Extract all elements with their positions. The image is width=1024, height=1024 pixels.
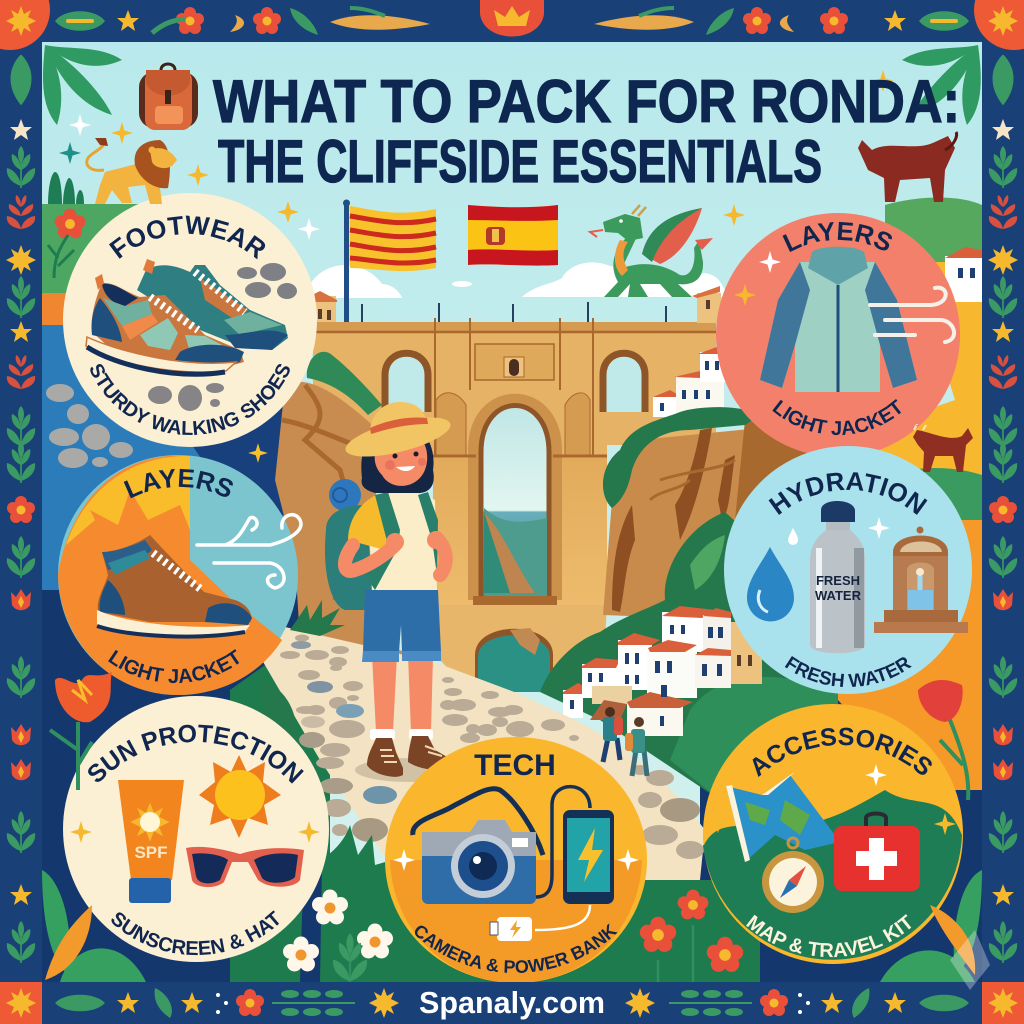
traveller <box>325 402 456 777</box>
caption: LIGHT JACKET <box>108 649 240 684</box>
water drop <box>747 547 794 621</box>
water bottle: FRESH <box>816 573 860 588</box>
panel: layers boot <box>58 443 303 695</box>
heading: ACCESSORIES <box>752 728 932 777</box>
panel: tech <box>385 737 647 982</box>
flag pole <box>343 200 350 324</box>
camera strap <box>413 789 543 855</box>
website credit: Spanaly.com <box>419 985 605 1020</box>
lion <box>87 138 177 204</box>
left cliff <box>275 352 440 665</box>
panel: footwear <box>63 193 317 447</box>
sun <box>199 755 281 838</box>
watermark sparkle <box>950 930 990 990</box>
hiking boot <box>97 535 252 637</box>
foreground plants <box>42 672 982 984</box>
right cliff <box>603 407 838 620</box>
phone cable <box>536 787 590 897</box>
title <box>213 68 960 195</box>
fountain <box>874 526 968 633</box>
map <box>726 772 840 862</box>
hiking boots <box>367 736 456 777</box>
water bottle: WATER <box>815 588 862 603</box>
panel: accessories <box>703 704 963 964</box>
jacket <box>760 247 917 392</box>
landscape <box>42 198 982 982</box>
Spanish flag <box>468 205 558 266</box>
camera <box>422 820 536 904</box>
first aid kit <box>834 814 920 891</box>
stones left <box>46 384 133 468</box>
caption: STURDY WALKING SHOES <box>90 364 290 435</box>
panel: sun protection <box>63 696 329 962</box>
heading: LAYERS <box>782 222 892 252</box>
caption: CAMERA & POWER BANK <box>414 924 618 973</box>
sunglasses <box>186 847 304 887</box>
panel: layers jacket <box>716 213 960 453</box>
arms <box>345 540 446 575</box>
Catalan flag <box>350 206 436 271</box>
water bottle <box>810 501 865 653</box>
rocks bottom <box>148 383 224 411</box>
plants near path <box>262 600 345 745</box>
corner leaves <box>43 45 981 125</box>
buildings top-left <box>310 291 337 322</box>
caption: FRESH WATER <box>784 656 912 687</box>
rocks top <box>237 263 297 299</box>
heading: FOOTWEAR <box>109 216 266 260</box>
trees on hill <box>48 172 84 204</box>
power bank <box>490 905 590 941</box>
caption: LIGHT JACKET <box>772 399 901 436</box>
front shoe <box>86 274 244 374</box>
wind lines <box>197 515 301 588</box>
heading: TECH <box>474 749 556 782</box>
white village top-right <box>653 247 982 417</box>
clouds <box>305 262 730 298</box>
small bull <box>913 425 973 472</box>
backpack <box>325 479 375 610</box>
legs <box>370 655 433 740</box>
compass <box>762 838 824 913</box>
heading: LAYERS <box>124 468 233 498</box>
wind lines <box>870 288 954 342</box>
sunscreen tube: SPF <box>134 843 168 862</box>
left hill flower <box>48 209 85 278</box>
smartphone <box>563 810 614 904</box>
sky accents <box>59 70 894 240</box>
back shoe <box>137 259 288 350</box>
heading: HYDRATION <box>768 472 928 515</box>
bull <box>858 132 957 202</box>
forest <box>540 512 838 800</box>
Puente Nuevo bridge <box>313 302 716 692</box>
hikers <box>603 707 647 776</box>
caption: MAP & TRAVEL KIT <box>746 914 912 958</box>
sunscreen tube <box>118 780 184 903</box>
cobblestone path <box>262 627 705 880</box>
hair and head <box>361 425 434 493</box>
straw hat <box>342 402 454 465</box>
green meadow below path <box>320 825 400 982</box>
shirt and shorts <box>348 492 441 662</box>
panel: hydration <box>724 446 972 694</box>
heading: SUN PROTECTION <box>88 724 304 784</box>
backpack icon <box>139 64 198 130</box>
lower village <box>563 606 762 736</box>
caption: SUNSCREEN & HAT <box>111 910 279 956</box>
dragon <box>590 205 713 297</box>
